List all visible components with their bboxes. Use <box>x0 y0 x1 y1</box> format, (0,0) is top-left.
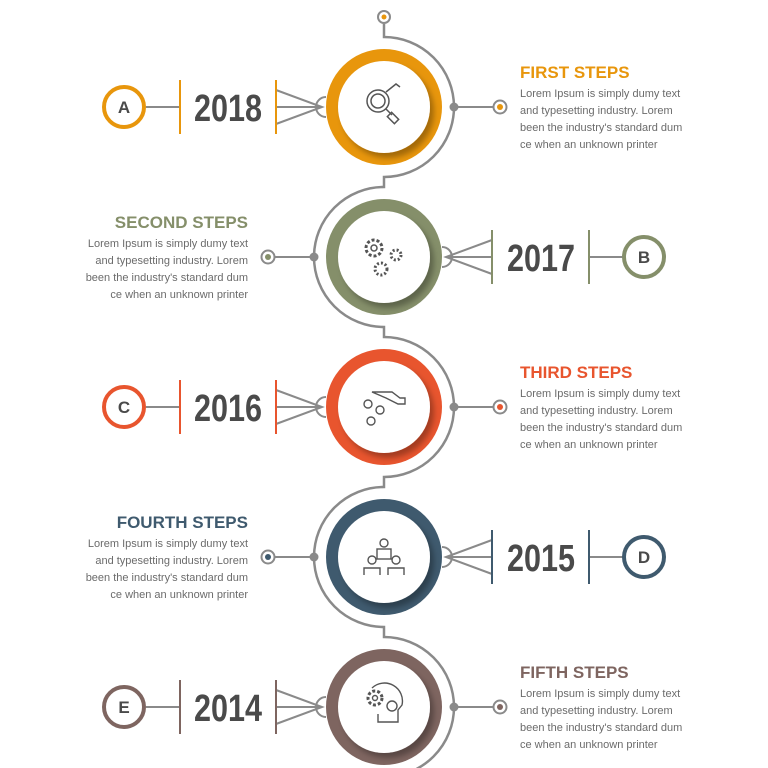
letter B: B <box>638 248 650 267</box>
text 3: been the industry's standard dum <box>520 422 682 434</box>
right connector 1 <box>450 100 506 114</box>
year 2018: 2018 <box>194 88 262 130</box>
letter C: C <box>118 398 130 417</box>
text 1: Lorem Ipsum is simply dumy text <box>520 88 680 100</box>
text 5: Lorem Ipsum is simply dumy text <box>520 688 680 700</box>
step 4 <box>86 499 664 615</box>
fan 3 <box>276 380 326 434</box>
letter A: A <box>118 98 130 117</box>
fan 2 <box>442 230 492 284</box>
text 3: and typesetting industry. Lorem <box>520 405 673 417</box>
top node <box>378 11 390 23</box>
year 2017: 2017 <box>507 238 575 280</box>
fan 1 <box>276 80 326 134</box>
text 1: and typesetting industry. Lorem <box>520 105 673 117</box>
year 2015: 2015 <box>507 538 575 580</box>
text 3 <box>520 363 682 451</box>
icon: magnifier <box>367 84 400 124</box>
right connector 3 <box>450 400 506 414</box>
year 2014: 2014 <box>194 688 262 730</box>
text 2: and typesetting industry. Lorem <box>95 255 248 267</box>
step 1 <box>104 49 682 165</box>
icon: gears <box>366 240 401 275</box>
right connector 5 <box>450 700 506 714</box>
letter D: D <box>638 548 650 567</box>
left connector 4 <box>262 550 318 564</box>
text 4: FOURTH STEPS <box>117 513 248 532</box>
letter A <box>104 80 180 134</box>
text 4 <box>86 513 248 601</box>
text 4: ce when an unknown printer <box>110 589 248 601</box>
icon: hand coins <box>364 392 405 425</box>
text 3: THIRD STEPS <box>520 363 632 382</box>
text 2 <box>86 213 248 301</box>
letter D <box>589 530 664 584</box>
circle 5 <box>326 649 442 765</box>
text 5 <box>520 663 682 751</box>
step 5 <box>104 649 682 765</box>
letter B <box>589 230 664 284</box>
fan 5 <box>276 680 326 734</box>
text 1: ce when an unknown printer <box>520 139 658 151</box>
text 1: FIRST STEPS <box>520 63 630 82</box>
text 5: ce when an unknown printer <box>520 739 658 751</box>
step 2 <box>86 199 664 315</box>
icon: head gear <box>368 683 402 722</box>
icon: meeting <box>364 539 404 575</box>
step 3 <box>104 349 682 465</box>
text 5: and typesetting industry. Lorem <box>520 705 673 717</box>
spine line <box>314 24 454 768</box>
circle 3 <box>326 349 442 465</box>
text 5: been the industry's standard dum <box>520 722 682 734</box>
letter E: E <box>118 698 130 717</box>
text 2: Lorem Ipsum is simply dumy text <box>88 238 248 250</box>
text 1: been the industry's standard dum <box>520 122 682 134</box>
text 1 <box>520 63 682 151</box>
circle 4 <box>326 499 442 615</box>
text 2: ce when an unknown printer <box>110 289 248 301</box>
text 3: Lorem Ipsum is simply dumy text <box>520 388 680 400</box>
text 2: SECOND STEPS <box>115 213 248 232</box>
text 5: FIFTH STEPS <box>520 663 629 682</box>
text 4: been the industry's standard dum <box>86 572 248 584</box>
circle 1 <box>326 49 442 165</box>
text 4: Lorem Ipsum is simply dumy text <box>88 538 248 550</box>
letter C <box>104 380 180 434</box>
text 2: been the industry's standard dum <box>86 272 248 284</box>
text 3: ce when an unknown printer <box>520 439 658 451</box>
circle 2 <box>326 199 442 315</box>
left connector 2 <box>262 250 318 264</box>
fan 4 <box>442 530 492 584</box>
text 4: and typesetting industry. Lorem <box>95 555 248 567</box>
letter E <box>104 680 180 734</box>
year 2016: 2016 <box>194 388 262 430</box>
